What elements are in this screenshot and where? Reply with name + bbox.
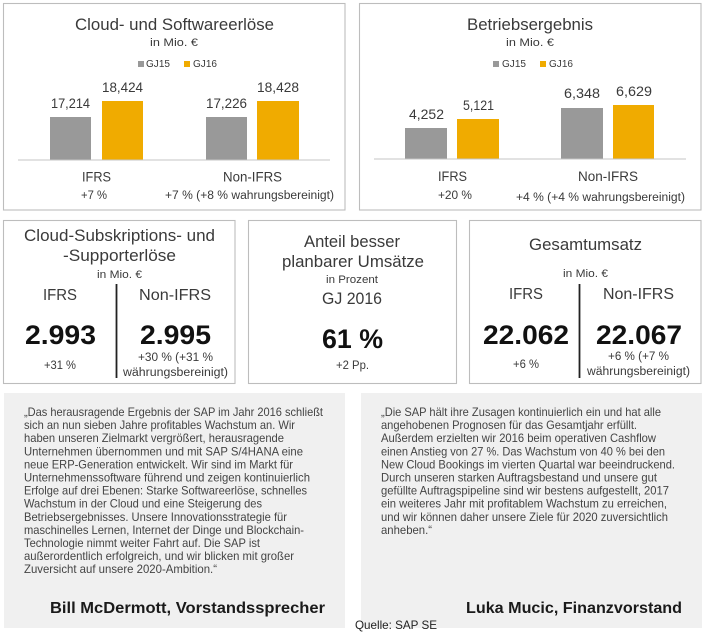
- bar chart: [18, 79, 330, 160]
- IFRS label: +7 %: [81, 190, 107, 202]
- quote text: einen Anstieg von 27 %. Das Wachstum von 40 % bei den: [381, 445, 665, 458]
- Non-IFRS label: +4 % (+4 % wahrungsbereinigt): [516, 192, 685, 204]
- heading: planbarer Umsätze: [282, 252, 424, 271]
- Non-IFRS column: Non-IFRS: [603, 286, 674, 303]
- IFRS column: 2.993: [25, 320, 96, 350]
- speaker: Luka Mucic, Finanzvorstand: [466, 600, 682, 617]
- speaker: Bill McDermott, Vorstandssprecher: [50, 600, 325, 617]
- divider: [578, 284, 580, 378]
- quote text: angehobenen Prognosen für das Gesamtjahr erfüllt.: [381, 419, 637, 432]
- panel: Betriebsergebnis: [360, 4, 701, 210]
- quote text: [381, 406, 675, 537]
- heading: Gesamtumsatz: [529, 235, 642, 254]
- bar chart: 5,121: [463, 97, 494, 113]
- quote text: „Die SAP hält ihre Zusagen kontinuierlich ein und hat alle: [381, 406, 661, 419]
- unit: in Mio. €: [506, 37, 554, 49]
- quote text: Technologie nimmt weiter Fahrt auf. Die SAP ist: [24, 537, 261, 550]
- change: +2 Pp.: [336, 360, 369, 372]
- legend: GJ15: [502, 59, 526, 70]
- Non-IFRS column: [122, 287, 228, 379]
- quote text: Betriebsergebnisses. Unsere Innovationsstrategie für: [24, 511, 287, 524]
- IFRS label: +20 %: [438, 190, 472, 202]
- IFRS column: IFRS: [509, 286, 543, 303]
- heading: Betriebsergebnis: [467, 15, 593, 34]
- quote text: maschinelles Lernen, Internet der Dinge und Blockchain-: [24, 524, 304, 537]
- bar chart: 6,629: [616, 83, 652, 99]
- unit: in Prozent: [326, 274, 378, 286]
- IFRS label: [438, 168, 472, 202]
- Non-IFRS label: +7 % (+8 % wahrungsbereinigt): [165, 190, 334, 202]
- bar chart: [374, 83, 686, 159]
- IFRS label: IFRS: [82, 168, 111, 184]
- bar chart: 6,348: [564, 85, 600, 101]
- Non-IFRS label: [165, 168, 334, 202]
- Non-IFRS column: 22.067: [596, 320, 682, 350]
- panel: Anteil besser planbarer Umsätze: [248, 220, 456, 384]
- quote text: Durch unseren starken Auftragsbestand und unsere gut: [381, 472, 658, 484]
- heading: -Supporterlöse: [63, 246, 176, 265]
- quote text: haben unseren Zielmarkt vergrößert, herausragende: [24, 432, 284, 445]
- panel: Cloud-Subskriptions- und -Supporterlöse: [4, 220, 235, 384]
- quote text: [24, 406, 324, 576]
- bar chart: 17,214: [51, 95, 90, 111]
- panel: Cloud- und Softwareerlöse: [4, 4, 345, 210]
- year: GJ 2016: [322, 289, 382, 308]
- Non-IFRS column: währungsbereinigt): [586, 366, 690, 378]
- IFRS column: [25, 287, 96, 372]
- quote text: Außerdem erzielten wir 2016 beim operativen Cashflow: [381, 432, 657, 445]
- quote text: ein weiteres Jahr mit profitablem Wachstum zu erreichen,: [381, 498, 667, 511]
- heading: [24, 226, 215, 265]
- IFRS label: IFRS: [438, 168, 467, 184]
- unit: in Mio. €: [563, 268, 608, 280]
- heading: [282, 232, 424, 271]
- legend: [138, 59, 217, 70]
- quote text: „Das herausragende Ergebnis der SAP im Jahr 2016 schließt: [24, 406, 324, 419]
- IFRS column: +31 %: [44, 360, 76, 372]
- quote text: Erfolge auf drei Ebenen: Starke Softwareerlöse, schnelles: [24, 485, 307, 498]
- legend: GJ16: [193, 59, 217, 70]
- big number: 61 %: [322, 324, 383, 354]
- quote text: Zuversicht auf unsere 2020-Ambition.“: [24, 563, 217, 576]
- IFRS column: IFRS: [43, 287, 77, 304]
- panel: Gesamtumsatz: [470, 220, 701, 384]
- Non-IFRS label: Non-IFRS: [578, 168, 638, 184]
- Non-IFRS column: 2.995: [140, 320, 211, 350]
- divider: [116, 284, 118, 378]
- Non-IFRS column: Non-IFRS: [139, 287, 211, 304]
- heading: Cloud- und Softwareerlöse: [75, 15, 274, 34]
- unit: in Mio. €: [150, 37, 198, 49]
- panel: quote Bill McDermott: [4, 393, 345, 628]
- quote text: New Cloud Bookings im vierten Quartal war beeindruckend.: [381, 458, 675, 471]
- Non-IFRS column: +30 % (+31 %: [138, 352, 213, 364]
- quote text: neue ERP-Generation entwickelt. Wir sind im Markt für: [24, 458, 293, 471]
- quote text: sich an nun sieben Jahre profitables Wachstum an. Wir: [24, 419, 295, 432]
- Non-IFRS column: +6 % (+7 %: [608, 351, 669, 363]
- IFRS column: [483, 286, 569, 371]
- quote text: Unternehmen übernommen und mit SAP S/4HANA eine: [24, 445, 303, 458]
- quote text: Unternehmenssoftware führend und zeigen kontinuierlich: [24, 472, 310, 484]
- Non-IFRS label: Non-IFRS: [223, 168, 282, 184]
- quote text: Wachstum in der Cloud und eine Steigerung des: [24, 498, 262, 511]
- bar chart: 4,252: [409, 106, 444, 122]
- legend: GJ16: [549, 59, 573, 70]
- panel: quote Luka Mucic: [361, 393, 702, 628]
- quote text: außerordentlich erfolgreich, und wir blicken mit großer: [24, 550, 294, 563]
- bar chart: 18,424: [102, 79, 143, 95]
- quote text: anheben.“: [381, 524, 432, 537]
- Non-IFRS label: [516, 168, 685, 204]
- Non-IFRS column: [586, 286, 690, 378]
- IFRS column: +6 %: [513, 359, 539, 371]
- quote text: und wir können daher unsere Ziele für 2020 zuversichtlich: [381, 511, 668, 524]
- heading: Anteil besser: [304, 232, 400, 251]
- bar chart: 18,428: [257, 79, 299, 95]
- heading: Cloud-Subskriptions- und: [24, 226, 215, 245]
- IFRS label: [81, 168, 111, 202]
- legend: GJ15: [146, 59, 170, 70]
- quote text: gefüllte Auftragspipeline sind wir bestens aufgestellt, 2017: [381, 485, 669, 498]
- Non-IFRS column: währungsbereinigt): [122, 367, 228, 379]
- unit: in Mio. €: [97, 269, 142, 281]
- legend: [493, 59, 573, 70]
- bar chart: 17,226: [206, 95, 247, 111]
- IFRS column: 22.062: [483, 320, 569, 350]
- source: Quelle: SAP SE: [355, 618, 437, 632]
